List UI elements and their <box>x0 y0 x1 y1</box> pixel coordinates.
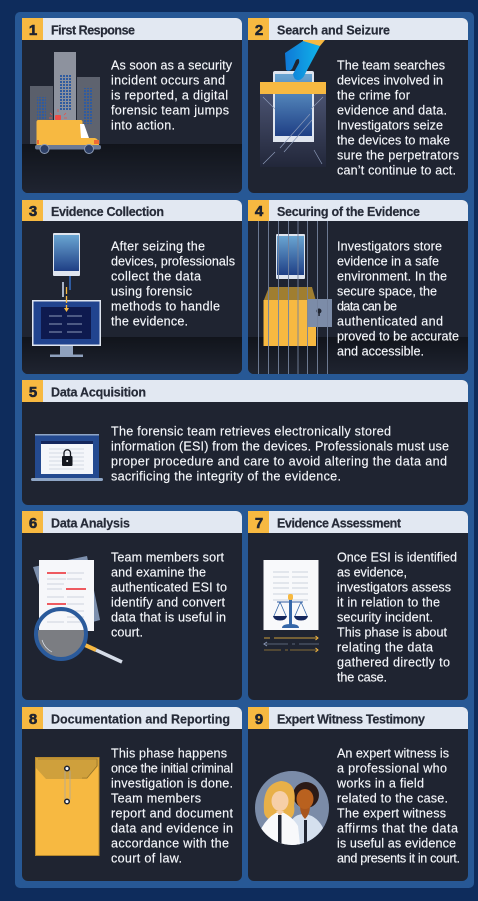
text: Evidence Assessment body: This phase is about <box>337 626 448 640</box>
icon: gloved hand bagging a tablet <box>260 40 326 167</box>
text: Expert Witness Testimony body <box>336 746 460 866</box>
text: Search and Seizure body: evidence and data. <box>337 104 447 118</box>
text: Data Analysis body: data that is useful in <box>111 610 226 624</box>
panel 7: Evidence Assessment <box>248 511 468 700</box>
text: Search and Seizure body: the devices to make <box>337 134 450 148</box>
panel 2: Search and Seizure: Search and Seizure <box>277 24 390 38</box>
panel 5: Data Acquisition: 5 <box>29 384 37 401</box>
text: Securing of the Evidence body: authenticated and <box>337 314 443 328</box>
panel 9: Expert Witness Testimony: Expert Witness Testimony <box>277 712 425 726</box>
text: Documentation and Reporting body: This phase happens <box>111 746 227 760</box>
text: Evidence Collection body: using forensic <box>111 284 192 298</box>
panel 5: Data Acquisition: Data Acquisition <box>51 386 146 400</box>
text: Securing of the Evidence body: evidence in a safe <box>337 254 439 268</box>
text: Search and Seizure body: devices involved in <box>337 74 443 88</box>
text: Securing of the Evidence body: proved to be accurate <box>337 330 459 344</box>
text: Data Acquisition body: proper procedure and care to avoid altering the data and <box>111 454 447 468</box>
text: First Response body: is reported, a digital <box>111 88 228 102</box>
text: Expert Witness Testimony body: affirms that the data <box>337 822 458 836</box>
text: Data Acquisition body: The forensic team retrieves electronically stored <box>111 424 391 438</box>
text: Evidence Collection body: collect the data <box>111 270 201 284</box>
text: Expert Witness Testimony body: a professional who <box>337 762 447 776</box>
text: Expert Witness Testimony body: The expert witness <box>337 806 446 820</box>
text: Evidence Assessment body: the case. <box>337 670 387 684</box>
text: First Response body: into action. <box>111 118 175 132</box>
text: Securing of the Evidence body: secure space, the <box>337 284 437 298</box>
text: Securing of the Evidence body <box>337 240 459 358</box>
text: Expert Witness Testimony body: is useful as evidence <box>337 836 456 850</box>
text: Data Acquisition body: sacrificing the integrity of the evidence. <box>111 470 341 484</box>
text: Evidence Assessment body <box>337 550 457 684</box>
icon: city and van <box>30 52 101 154</box>
text: Evidence Collection body <box>111 240 235 328</box>
text: Evidence Assessment body: gathered directly to <box>337 656 450 670</box>
icon: laptop with padlock <box>31 434 103 481</box>
text: Evidence Assessment body: investigators assess <box>337 580 451 594</box>
text: Search and Seizure body: can’t continue to act. <box>337 164 456 178</box>
panel 1: First Response <box>22 18 242 193</box>
panel 4: Securing of the Evidence: 4 <box>255 203 264 220</box>
icon: documents under magnifier <box>33 556 122 662</box>
panel 7: Evidence Assessment: 7 <box>255 515 263 532</box>
text: Documentation and Reporting body: court of law. <box>111 852 182 866</box>
text: Data Analysis body: Team members sort <box>111 550 224 564</box>
text: First Response body <box>111 58 233 132</box>
panel 2: Search and Seizure: 2 <box>255 22 263 39</box>
text: Documentation and Reporting body: report and document <box>111 806 234 820</box>
text: Documentation and Reporting body: investigation is done. <box>111 776 233 790</box>
text: Data Analysis body: court. <box>111 626 143 640</box>
panel 3: Evidence Collection <box>22 200 242 374</box>
icon: string-tie envelope <box>36 758 99 856</box>
text: Data Analysis body: identify and convert <box>111 596 226 610</box>
panel 8: Documentation and Reporting <box>22 707 242 881</box>
panel 1: First Response: First Response <box>51 24 135 38</box>
text: Data Analysis body: and examine the <box>111 566 206 580</box>
panel 8: Documentation and Reporting: 8 <box>29 711 37 728</box>
text: Data Acquisition body: information (ESI) from the devices. Professionals must use <box>111 440 449 454</box>
panel 6: Data Analysis <box>22 511 242 700</box>
text: Evidence Collection body: After seizing the <box>111 240 205 254</box>
text: Data Analysis body: authenticated ESI to <box>111 580 227 594</box>
text: Evidence Collection body: methods to handle <box>111 300 220 314</box>
icon: locked evidence box behind bars <box>258 221 332 374</box>
icon: two expert witnesses <box>255 771 329 845</box>
text: Evidence Assessment body: as evidence, <box>337 566 407 580</box>
text: Evidence Assessment body: relating the data <box>337 640 433 654</box>
panel 2: Search and Seizure <box>248 18 468 193</box>
text: Documentation and Reporting body: accordance with the <box>111 836 229 850</box>
text: Data Analysis body <box>111 550 227 640</box>
text: Securing of the Evidence body: Investigators store <box>337 240 442 254</box>
panel 4: Securing of the Evidence: Securing of the Evidence <box>277 205 420 219</box>
panel 7: Evidence Assessment: Evidence Assessment <box>277 516 402 530</box>
text: Expert Witness Testimony body: works in a field <box>336 776 424 790</box>
text: Securing of the Evidence body: and accessible. <box>337 344 424 358</box>
panel 9: Expert Witness Testimony: 9 <box>255 711 263 728</box>
text: Search and Seizure body: sure the perpetrators <box>337 148 459 162</box>
text: Evidence Assessment body: it in relation to the <box>337 596 440 610</box>
text: Evidence Collection body: the evidence. <box>111 314 188 328</box>
text: Evidence Assessment body: Once ESI is identified <box>337 550 457 564</box>
text: First Response body: As soon as a security <box>111 58 233 72</box>
text: Search and Seizure body: The team searches <box>337 58 445 72</box>
text: First Response body: incident occurs and <box>111 74 225 88</box>
text: Securing of the Evidence body: environment. In the <box>337 270 447 284</box>
text: Expert Witness Testimony body: related to the case. <box>337 792 448 806</box>
text: Documentation and Reporting body: data and evidence in <box>111 822 233 836</box>
text: Expert Witness Testimony body: An expert witness is <box>337 746 449 760</box>
panel 9: Expert Witness Testimony <box>248 707 468 881</box>
panel 3: Evidence Collection: Evidence Collection <box>51 205 164 219</box>
text: Data Acquisition body <box>111 424 449 484</box>
text: First Response body: forensic team jumps <box>111 104 229 118</box>
text: Search and Seizure body: the crime for <box>337 88 410 102</box>
panel 6: Data Analysis: Data Analysis <box>51 516 130 530</box>
panel 1: First Response: 1 <box>29 22 37 39</box>
text: Documentation and Reporting body: Team members <box>111 792 201 806</box>
text: Search and Seizure body: Investigators seize <box>337 118 443 132</box>
panel 3: Evidence Collection: 3 <box>29 203 37 220</box>
text: Search and Seizure body <box>337 58 459 178</box>
text: Documentation and Reporting body <box>111 746 234 866</box>
text: Expert Witness Testimony body: and presents it in court. <box>337 852 460 866</box>
icon: tablet connected to monitor <box>32 233 101 357</box>
text: Evidence Assessment body: security incident. <box>337 610 433 624</box>
text: Evidence Collection body: devices, professionals <box>111 254 235 268</box>
text: Securing of the Evidence body: data can be <box>337 300 397 314</box>
panel 4: Securing of the Evidence <box>248 200 468 374</box>
panel 6: Data Analysis: 6 <box>29 515 37 532</box>
text: Documentation and Reporting body: once the initial criminal <box>111 762 233 776</box>
panel 8: Documentation and Reporting: Documentation and Reporting <box>51 712 230 726</box>
panel 5: Data Acquisition <box>22 380 468 505</box>
icon: document with scales and arrows <box>264 560 319 652</box>
